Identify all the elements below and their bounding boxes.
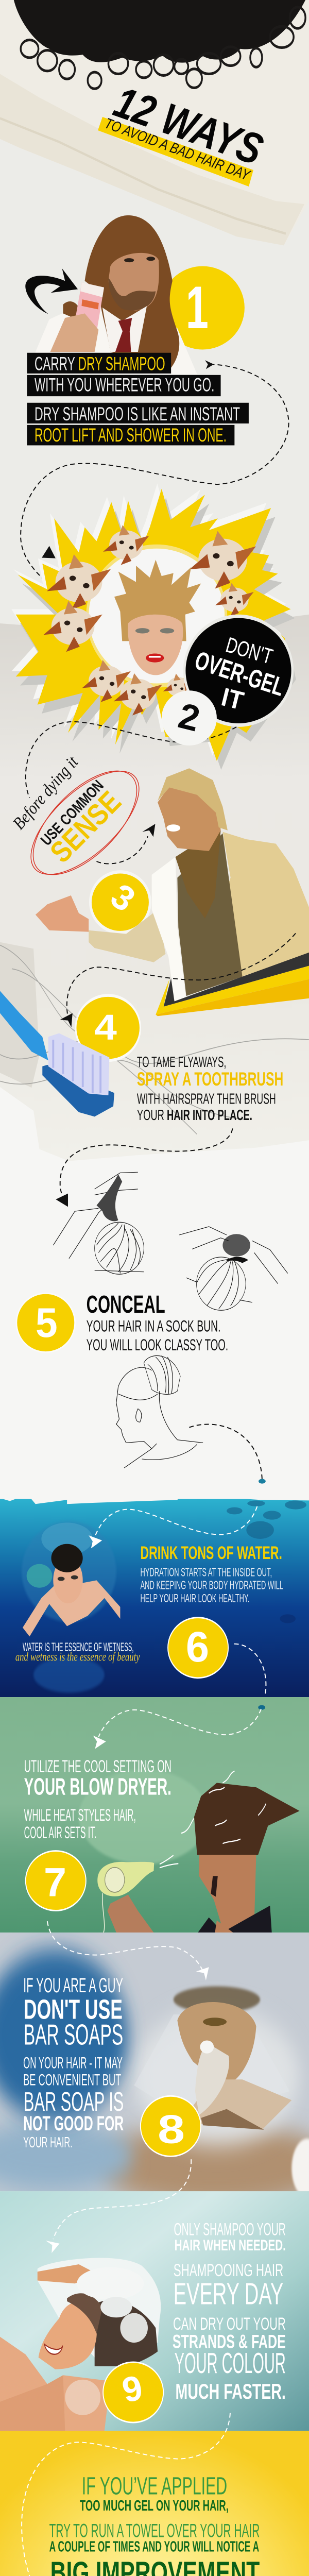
- text block: conceal: YOU WILL LOOK CLASSY TOO.: [87, 1336, 228, 1354]
- bubbles: [227, 1500, 306, 1623]
- black bubble: don't over-gel it: IT: [218, 682, 247, 716]
- text block: don't use bar soaps: BAR SOAP IS: [24, 2087, 124, 2117]
- text block: blow dryer: [24, 1756, 171, 1842]
- page background: [0, 0, 309, 1185]
- text block: shampoo: [173, 2220, 286, 2404]
- number badge 1: [161, 266, 245, 349]
- text block: if you've applied: IF YOU’VE APPLIED: [82, 2472, 227, 2500]
- photo: man with soap in shower: [134, 1986, 291, 2130]
- text block: drink water: [140, 1543, 283, 1605]
- photo: face with spiky hair: [114, 560, 201, 675]
- dashed arrow 9 to 10: [22, 2413, 230, 2576]
- hair dryer and hand: [97, 1862, 154, 1933]
- number badge 5: [16, 1293, 76, 1353]
- panel: tip 7 blow dryer: [0, 1697, 309, 1947]
- text block: if you've applied: TOO MUCH GEL ON YOUR HAIR,: [80, 2498, 229, 2514]
- text block: spray a toothbrush: SPRAY A TOOTHBRUSH: [137, 1068, 283, 1090]
- red scribble ellipse with use common sense: SENSE: [44, 785, 128, 869]
- panel: tip 1 dry shampoo: [21, 215, 289, 583]
- text block: don't use bar soaps: DON'T USE: [24, 1993, 123, 2025]
- panel: tip 3 use common sense: [9, 751, 309, 1018]
- title banner: TO AVOID A BAD HAIR DAY: [102, 115, 253, 184]
- text block: don't use bar soaps: ON YOUR HAIR - IT MAY: [23, 2054, 123, 2072]
- photo: long-haired man with dry shampoo: [36, 215, 197, 374]
- arrowhead: [60, 1013, 73, 1027]
- text block: blow dryer: COOL AIR SETS IT.: [24, 1823, 96, 1842]
- text block: don't use bar soaps: YOUR HAIR.: [23, 2135, 73, 2151]
- number badge 1: 1: [186, 274, 209, 341]
- text block: spray a toothbrush: WITH HAIRSPRAY THEN BRUSH: [137, 1091, 276, 1108]
- panel: tip 10 gel: [0, 2413, 309, 2576]
- yellow and black frame: [156, 953, 309, 1016]
- text block: carry dry shampoo: CARRY DRY SHAMPOO: [35, 352, 165, 375]
- dashed arrow 4 to 5: [56, 1128, 233, 1207]
- panel: tip 6 drink water background: [0, 1495, 309, 1697]
- arrowhead into tip 2: [42, 546, 56, 558]
- teal background: [0, 2191, 309, 2431]
- white circle with ring: [86, 545, 227, 688]
- panel: tip 5 conceal: [16, 1128, 288, 1484]
- red scribble ellipse with use common sense: USE COMMON: [38, 777, 107, 849]
- quote text: WATER IS THE ESSENCE OF WETNESS,: [23, 1640, 133, 1654]
- panel: header with towel and curly hair: [0, 0, 309, 245]
- text block: carry dry shampoo: WITH YOU WHEREVER YOU GO.: [35, 374, 214, 396]
- text block: blow dryer: YOUR BLOW DRYER.: [24, 1774, 171, 1800]
- cats around circle: [43, 525, 256, 716]
- text block: shampoo: SHAMPOOING HAIR: [174, 2261, 283, 2280]
- text block: conceal: [87, 1290, 228, 1354]
- panel: tip 8 bar soap: [0, 1921, 309, 2207]
- number badge 7: 7: [44, 1860, 66, 1905]
- curved arrow: [25, 268, 78, 314]
- text block: conceal: YOUR HAIR IN A SOCK BUN.: [87, 1317, 221, 1335]
- dashed arrow 7 to 8: [47, 1921, 209, 1980]
- text block: if you've applied: A COUPLE OF TIMES AND YOUR WILL NOTICE A: [49, 2539, 259, 2555]
- photo: swimmer: [23, 1544, 120, 1636]
- text block: drink water: DRINK TONS OF WATER.: [140, 1543, 282, 1563]
- text block: shampoo: STRANDS & FADE: [173, 2331, 286, 2352]
- sketch: hair tied step one: [53, 1172, 144, 1274]
- title: 12 ways: 12 WAYS: [108, 77, 269, 175]
- dashed arrow 6 to 7: [234, 1644, 266, 1696]
- text block: don't use bar soaps: BAR SOAPS: [24, 2019, 123, 2051]
- text block: drink water: HYDRATION STARTS AT THE INSIDE OUT,: [140, 1566, 272, 1579]
- dashed arrow to text: [93, 1705, 265, 1749]
- text block: shampoo: MUCH FASTER.: [176, 2380, 286, 2404]
- black bubble: don't over-gel it: DON'T: [224, 632, 276, 669]
- text block: carry dry shampoo: DRY SHAMPOO IS LIKE AN INSTANT: [35, 403, 240, 425]
- sketch: woman profile with bun: [116, 1355, 203, 1468]
- red scribble ellipse with use common sense: [13, 751, 157, 895]
- yellow background: [0, 2431, 309, 2576]
- text block: carry dry shampoo: ROOT LIFT AND SHOWER IN ONE.: [35, 424, 227, 446]
- number badge 7: [26, 1851, 86, 1910]
- numeral 9: 9: [119, 2368, 146, 2410]
- number badge 3: [89, 870, 151, 934]
- text block: drink water: AND KEEPING YOUR BODY HYDRATED WILL: [140, 1579, 283, 1592]
- number badge 2: [162, 690, 217, 745]
- photo: woman with blown hair: [160, 1771, 300, 1947]
- text block: don't use bar soaps: BE CONVENIENT BUT: [23, 2071, 121, 2089]
- dashed arrow 5 to 6: [189, 1425, 266, 1484]
- flyaway hairs: [0, 945, 309, 1134]
- quote text: [15, 1640, 140, 1664]
- photo: woman shampooing: [0, 2258, 161, 2431]
- panel: worn paper background: [0, 615, 309, 1161]
- panel: tip 2 don't over-gel: [11, 483, 296, 798]
- text block: don't use bar soaps: IF YOU ARE A GUY: [23, 1974, 123, 1997]
- handwritten note: before dying it: Before dying it: [9, 752, 82, 833]
- quote text: and wetness is the essence of beauty: [15, 1650, 140, 1664]
- dashed arrow 3 to 4: [67, 933, 296, 1018]
- panel: tip 4 toothbrush: [0, 945, 309, 1134]
- number badge 2: 2: [175, 696, 204, 739]
- text block: carry dry shampoo: [27, 352, 249, 446]
- title banner: [98, 115, 253, 187]
- soft blue and tan background: [0, 1933, 309, 2207]
- number badge 4: 4: [94, 1007, 117, 1047]
- text block: shampoo: CAN DRY OUT YOUR: [173, 2314, 286, 2334]
- bubble cloud: [22, 1521, 116, 1692]
- number badge 5: 5: [36, 1300, 58, 1346]
- panel: tip 9 shampoo when needed: [0, 2159, 309, 2431]
- number badge 8: 8: [158, 2107, 185, 2151]
- black bubble: don't over-gel it: [183, 615, 294, 727]
- text block: shampoo: HAIR WHEN NEEDED.: [175, 2237, 286, 2254]
- text block: blow dryer: UTILIZE THE COOL SETTING ON: [24, 1756, 171, 1775]
- dashed arrow 1 to 2: [21, 360, 289, 583]
- text block: spray a toothbrush: YOUR HAIR INTO PLACE.: [137, 1108, 252, 1124]
- number badge 6: 6: [186, 1623, 209, 1671]
- number badge 4: [75, 994, 141, 1062]
- number badge 9: [103, 2362, 163, 2422]
- text block: spray a toothbrush: [137, 1054, 283, 1124]
- text block: shampoo: EVERY DAY: [174, 2276, 283, 2311]
- numeral 3: 3: [104, 876, 142, 920]
- dashed arrow 2 to 3: [26, 722, 236, 798]
- sketch: hair tied step two: [179, 1227, 288, 1310]
- text block: don't use bar soaps: NOT GOOD FOR: [23, 2112, 124, 2135]
- text block: if you've applied: [49, 2472, 260, 2576]
- text block: shampoo: ONLY SHAMPOO YOUR: [174, 2220, 286, 2240]
- text block: drink water: HELP YOUR HAIR LOOK HEALTHY.: [140, 1592, 249, 1605]
- photo: man in cream jacket: [36, 768, 309, 1001]
- number badge 6: [168, 1618, 228, 1678]
- towel: [0, 0, 309, 245]
- panel: tip 6 drink water: [15, 1500, 306, 1696]
- starburst: [11, 483, 296, 770]
- dashed arrow to man: [96, 824, 156, 863]
- dashed arrow 8 to 9: [46, 2159, 191, 2253]
- green background: [0, 1697, 309, 1934]
- text block: blow dryer: WHILE HEAT STYLES HAIR,: [24, 1806, 136, 1824]
- text block: conceal: CONCEAL: [87, 1290, 165, 1318]
- text block: spray a toothbrush: TO TAME FLYAWAYS,: [137, 1054, 226, 1071]
- toothbrush: [0, 991, 114, 1116]
- panel: tip 5 sock bun background: [0, 1087, 309, 1500]
- text block: don't use bar soaps: [23, 1974, 124, 2151]
- curly hair: [14, 0, 305, 89]
- text block: if you've applied: TRY TO RUN A TOWEL OVER YOUR HAIR: [49, 2520, 260, 2541]
- dashed arrow into swimmer: [89, 1506, 257, 1548]
- number badge 8: [141, 2096, 201, 2156]
